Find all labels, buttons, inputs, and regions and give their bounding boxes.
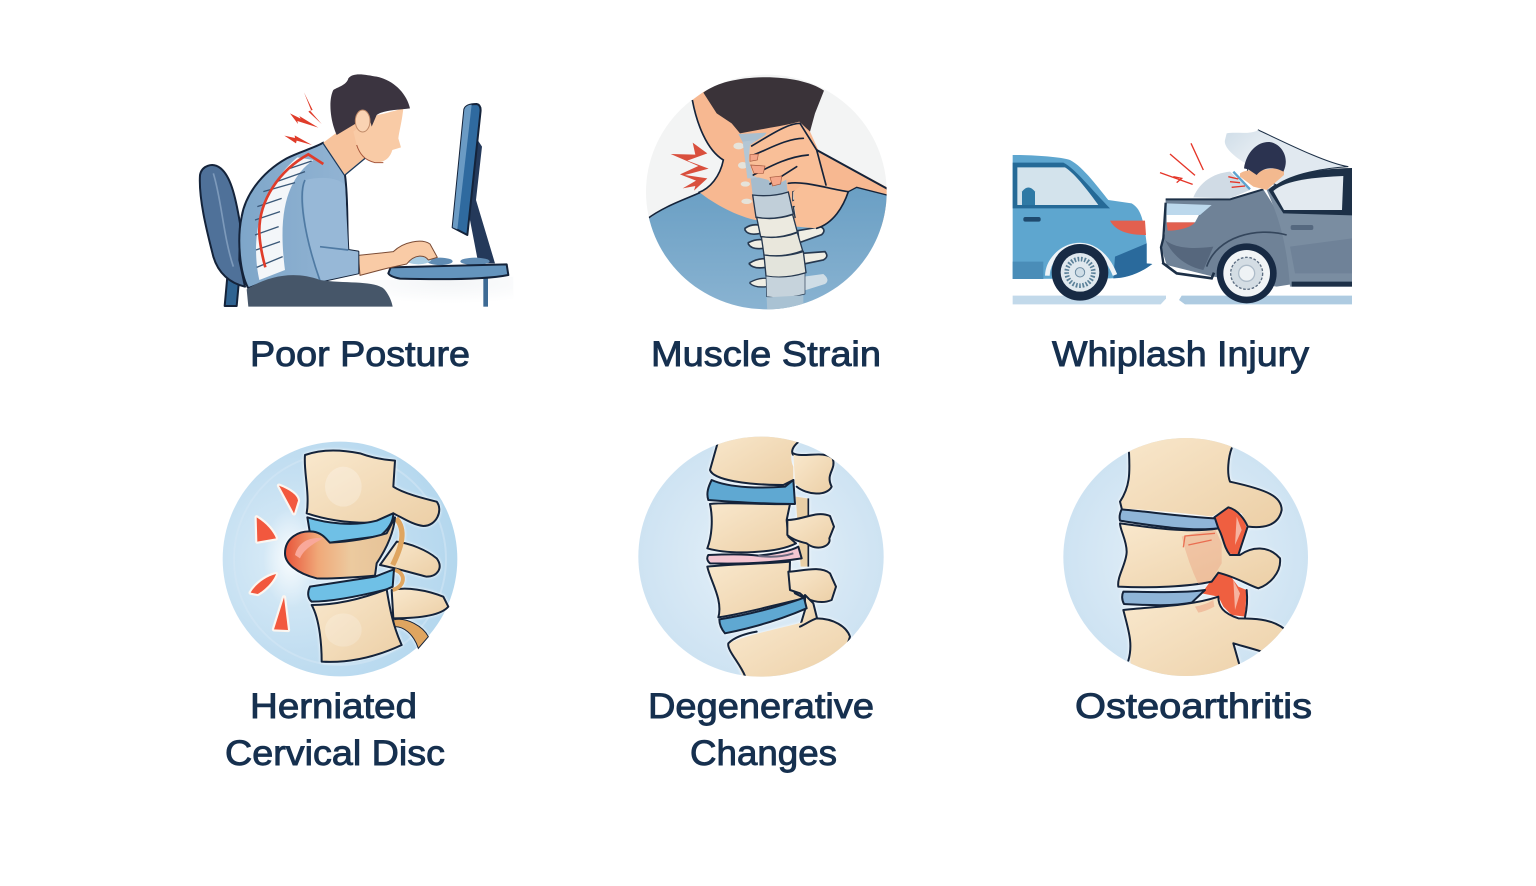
neck skin [692,91,893,227]
hair [703,77,824,133]
top vertebra [1120,430,1282,527]
label: Degenerative Changes [648,687,874,773]
hand on neck [749,123,848,228]
discs [307,513,393,543]
bottom vertebra [729,620,849,677]
middle vertebra [1118,523,1280,588]
top vertebra [710,430,798,485]
red inflamed joints [1214,507,1247,555]
torso with spine [239,143,358,288]
blue disc top [707,480,795,504]
top vertebra [305,450,439,526]
pain bolts [284,92,322,145]
label: Osteoarthritis: Osteoarthritis [1075,687,1312,726]
airbag and driver [1193,130,1348,198]
label: Poor Posture: Poor Posture [250,335,470,374]
pain zigzag [671,143,709,191]
pink thinned disc [707,547,802,564]
office chair [200,165,245,306]
road strips [1013,296,1352,304]
icon: whiplash car collision [1013,130,1352,304]
label: Herniated Cervical Disc: Herniated [250,687,417,726]
label: Whiplash Injury: Whiplash Injury [1052,335,1310,374]
icon: muscle strain at the neck [637,75,897,317]
trousers [247,275,393,307]
bottom vertebra [1124,598,1283,676]
third vertebra [707,562,805,617]
infographic: causes of neck pain [198,74,1352,773]
bottom vertebra [312,589,402,662]
icon: degenerative disc changes [638,430,884,687]
icon: poor posture at a computer [200,74,513,307]
label: Muscle Strain: Muscle Strain [651,335,881,374]
label: Herniated Cervical Disc: Cervical Disc [225,734,445,773]
label: Herniated Cervical Disc [225,687,445,773]
label: Degenerative Changes: Degenerative [648,687,874,726]
second vertebra [707,503,796,552]
grey car [1161,168,1352,303]
shirt [649,188,887,310]
blue disc bottom [719,598,807,633]
icon: herniated cervical disc [223,442,457,676]
canal [393,619,428,648]
hair [330,74,410,135]
label: Degenerative Changes: Changes [690,734,837,773]
forearm and hand [358,241,437,275]
disc top [1120,509,1218,529]
icon: osteoarthritis [1063,430,1308,687]
spine [733,133,827,313]
ear [355,110,370,132]
disc bottom [1122,590,1205,605]
pain lines [1160,143,1245,187]
keyboard and desk [388,254,508,307]
facet processes [380,542,440,577]
red pain markers [251,486,298,630]
blue car [1013,155,1152,301]
monitor [453,104,495,263]
herniated disc [285,517,395,578]
vertebrae group [285,450,448,662]
neck and face [323,108,403,175]
